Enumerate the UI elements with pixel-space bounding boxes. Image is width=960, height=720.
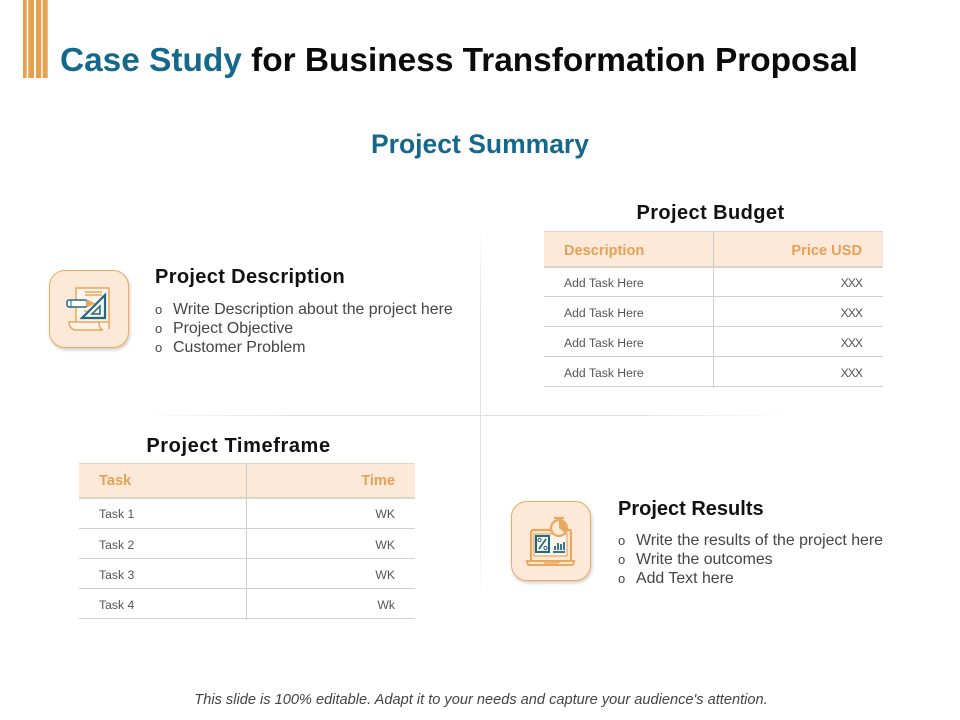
bullet list: o — [618, 533, 625, 548]
bullet list: o — [618, 571, 625, 586]
table: timeframe: WK — [375, 568, 395, 582]
bullet list: Write Description about the project here — [173, 301, 453, 318]
decorative stripes — [23, 0, 48, 78]
heading: Project Description — [155, 266, 345, 288]
icon: laptop with stopwatch and chart — [511, 501, 591, 581]
panel: project description — [48, 266, 453, 356]
quadrant divider: horizontal — [140, 415, 790, 416]
bullet list: o — [618, 552, 625, 567]
table: timeframe: Task 2 — [99, 538, 134, 552]
bullet list: Customer Problem — [173, 339, 305, 356]
table: budget: XXX — [841, 366, 862, 380]
table: budget: Price USD — [791, 243, 862, 259]
bullet list: Project Objective — [173, 320, 293, 337]
table: timeframe: Task 1 — [99, 507, 134, 521]
subtitle: project summary: Project Summary — [371, 129, 589, 159]
table: timeframe: Task — [99, 473, 131, 489]
table: budget: Add Task Here — [564, 366, 644, 380]
footer note: This slide is 100% editable. Adapt it to your needs and capture your audience's attention. — [194, 692, 768, 708]
icon: document with pencil and set square — [49, 270, 129, 348]
table: timeframe: Task 3 — [99, 568, 134, 582]
table: budget: Add Task Here — [564, 306, 644, 320]
panel: project results — [510, 498, 883, 587]
table: budget: Add Task Here — [564, 276, 644, 290]
bullet list: Add Text here — [636, 570, 734, 587]
table: timeframe: Task 4 — [99, 598, 134, 612]
bullet list — [155, 301, 453, 356]
quadrant divider: vertical — [480, 225, 481, 600]
table: budget: Add Task Here — [564, 336, 644, 350]
table: timeframe: WK — [375, 507, 395, 521]
heading: Project Results — [618, 498, 764, 520]
table: timeframe: Wk — [377, 598, 395, 612]
bullet list — [618, 532, 883, 587]
title: Case Study for Business Transformation Proposal — [60, 42, 858, 79]
bullet list: o — [155, 302, 162, 317]
heading: Project Budget — [636, 202, 785, 224]
heading: Project Timeframe — [146, 435, 331, 457]
table: budget: Description — [564, 243, 644, 259]
table: budget: XXX — [841, 336, 862, 350]
panel: project budget — [544, 202, 883, 388]
table: timeframe — [79, 463, 415, 620]
bullet list: o — [155, 321, 162, 336]
bullet list: Write the outcomes — [636, 551, 773, 568]
bullet list: o — [155, 340, 162, 355]
table: timeframe: WK — [375, 538, 395, 552]
panel: project timeframe — [79, 435, 415, 620]
bullet list: Write the results of the project here — [636, 532, 883, 549]
table: budget: XXX — [841, 276, 862, 290]
table: budget: XXX — [841, 306, 862, 320]
table: timeframe: Time — [361, 473, 395, 489]
table: budget — [544, 231, 883, 388]
